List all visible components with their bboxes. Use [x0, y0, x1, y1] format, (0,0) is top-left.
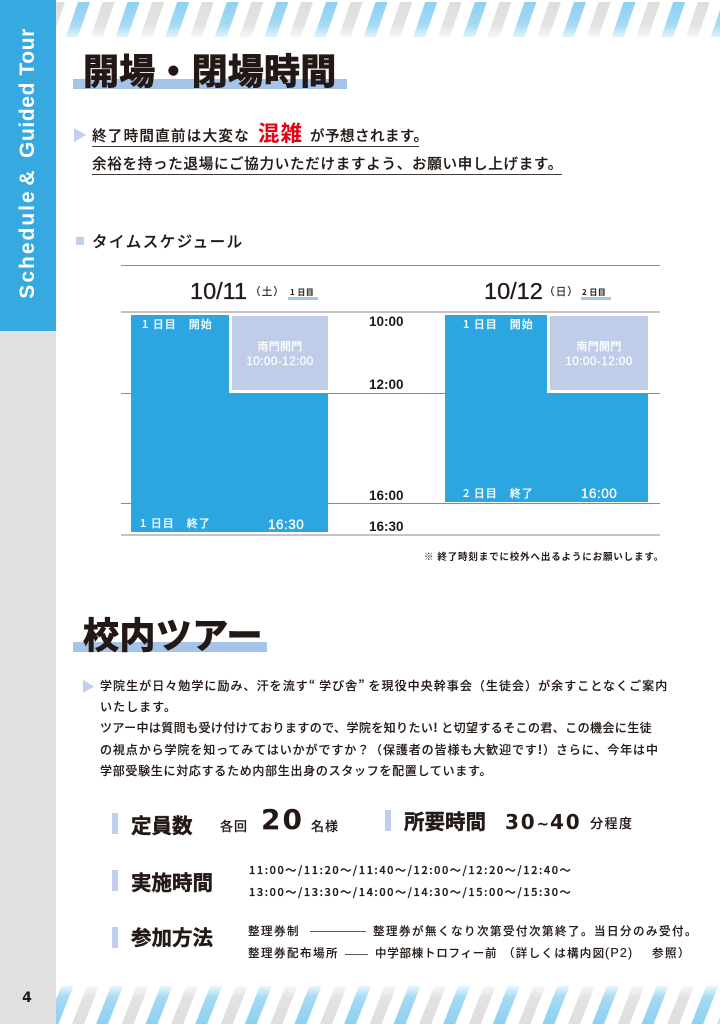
notice line 2: 余裕を持った退場にご協力いただけますよう、お願い申し上げます。	[92, 153, 563, 174]
ticket location detail: 中学部棟トロフィー前	[375, 945, 497, 961]
info: how to join	[112, 921, 698, 961]
highlight word: congestion: 混雑	[258, 117, 303, 148]
sidebar title word: Schedule: Schedule	[16, 189, 39, 298]
table rule header	[121, 311, 660, 313]
date header: 10/12	[484, 278, 611, 304]
table rule bottom	[121, 534, 660, 536]
connector line	[345, 954, 368, 955]
description line 4: の視点から学院を知ってみてはいかがですか？（保護者の皆様も大歓迎です!）さらに、今年は中	[100, 741, 659, 758]
date: 10/12	[484, 278, 543, 304]
time 12:00: 12:00	[369, 377, 404, 392]
label: 定員数	[131, 809, 192, 839]
info: capacity	[112, 803, 339, 839]
sidebar title symbol: &	[16, 170, 39, 185]
see reference: 参照）	[652, 945, 691, 961]
connector line	[310, 931, 366, 932]
ticket system term: 整理券制	[248, 923, 300, 939]
time slots line 1: 11:00～/11:20～/11:40～/12:00～/12:20～/12:40～	[249, 862, 572, 878]
sidebar: grey column	[0, 0, 56, 1024]
ticket location term: 整理券配布場所	[248, 945, 339, 961]
capacity unit: 名様	[311, 816, 339, 835]
capacity number: 20	[261, 803, 304, 836]
gate hours: 10:00-12:00	[565, 354, 633, 368]
schedule footnote: ※ 終了時刻までに校外へ出るようにお願いします。	[424, 549, 664, 563]
date header: 10/11	[190, 278, 318, 304]
day 1 end label: 1 日目 終了	[140, 515, 211, 531]
sidebar: blue section tab	[0, 0, 56, 331]
bottom stripe band	[56, 986, 720, 1024]
day 2 start label: 1 日目 開始	[463, 316, 534, 332]
description line 3: ツアー中は質問も受け付けておりますので、学院を知りたい! と切望するそこの君、この機会に生徒	[100, 719, 652, 736]
notice line 1 end: が予想されます。	[310, 125, 429, 146]
duration number: 30~40	[505, 810, 581, 834]
top stripe band	[56, 2, 720, 37]
label: 所要時間	[404, 805, 486, 835]
icon: square bullet	[76, 237, 84, 245]
info: tour times	[112, 862, 572, 900]
time axis labels	[369, 314, 404, 534]
page reference: (P2)	[605, 946, 633, 960]
info: duration	[385, 805, 634, 835]
day marker: 1 日目	[290, 287, 314, 298]
heading underline	[73, 79, 347, 89]
description line 1: 学院生が日々勉学に励み、汗を流す“学び舎”を現役中央幹事会（生徒会）が余すことなくご案内	[100, 677, 668, 694]
heading text: 校内ツアー	[83, 607, 263, 659]
sidebar title words: Guided Tour: Guided Tour	[16, 28, 39, 157]
bar marker	[112, 813, 118, 834]
day 1 start label: 1 日目 開始	[142, 316, 213, 332]
bar marker	[112, 927, 118, 948]
day 2 time block	[445, 315, 648, 502]
day 1 gate notch	[229, 315, 328, 393]
day 1 gate panel	[232, 316, 328, 390]
day 2 end time: 16:00	[581, 486, 617, 501]
heading: campus tour	[73, 607, 267, 659]
notice line 1: 終了時間直前は大変な	[92, 125, 250, 146]
day 2 gate notch	[547, 315, 648, 393]
duration unit: 分程度	[590, 813, 634, 832]
heading: opening and closing hours	[73, 43, 347, 95]
page number: 4	[22, 990, 32, 1006]
bar marker	[112, 870, 118, 891]
time 16:30: 16:30	[369, 519, 404, 534]
tour description	[83, 677, 668, 779]
table rule top	[121, 265, 660, 266]
notice line 1	[92, 126, 419, 147]
day 1 time block	[131, 315, 328, 532]
heading: time schedule: タイムスケジュール	[92, 230, 244, 252]
gate label: 南門開門	[576, 338, 622, 354]
table rule 12:00	[121, 393, 660, 394]
heading text: 開場・閉場時間	[83, 43, 336, 95]
weekday: （日）	[544, 284, 579, 299]
per session: 各回	[220, 816, 248, 835]
table rule 16:00	[121, 503, 660, 504]
ticket system detail: 整理券が無くなり次第受付次第終了。当日分のみ受付。	[373, 923, 698, 939]
heading underline	[73, 642, 267, 652]
date: 10/11	[190, 278, 247, 304]
description line 2: いたします。	[100, 698, 177, 715]
ticket location map note: （詳しくは構内図	[503, 945, 605, 961]
time 16:00: 16:00	[369, 488, 404, 503]
time slots line 2: 13:00～/13:30～/14:00～/14:30～/15:00～/15:30～	[249, 884, 572, 900]
day marker underline	[288, 297, 318, 300]
icon: triangle bullet	[74, 128, 86, 142]
description line 5: 学部受験生に対応するため内部生出身のスタッフを配置しています。	[100, 762, 492, 779]
bar marker	[385, 810, 391, 831]
day 1 end time: 16:30	[268, 517, 304, 532]
day 2 gate panel	[550, 316, 648, 390]
day marker underline	[581, 297, 611, 300]
time 10:00: 10:00	[369, 314, 404, 329]
gate hours: 10:00-12:00	[246, 354, 314, 368]
weekday: （土）	[250, 284, 285, 299]
day marker: 2 日目	[582, 287, 606, 298]
schedule table	[121, 265, 660, 536]
day 2 end label: 2 日目 終了	[463, 485, 534, 501]
label: 参加方法	[131, 921, 213, 951]
notice: congestion before closing	[74, 117, 563, 175]
label: 実施時間	[131, 866, 213, 896]
icon: triangle bullet	[83, 680, 94, 693]
gate label: 南門開門	[257, 338, 303, 354]
